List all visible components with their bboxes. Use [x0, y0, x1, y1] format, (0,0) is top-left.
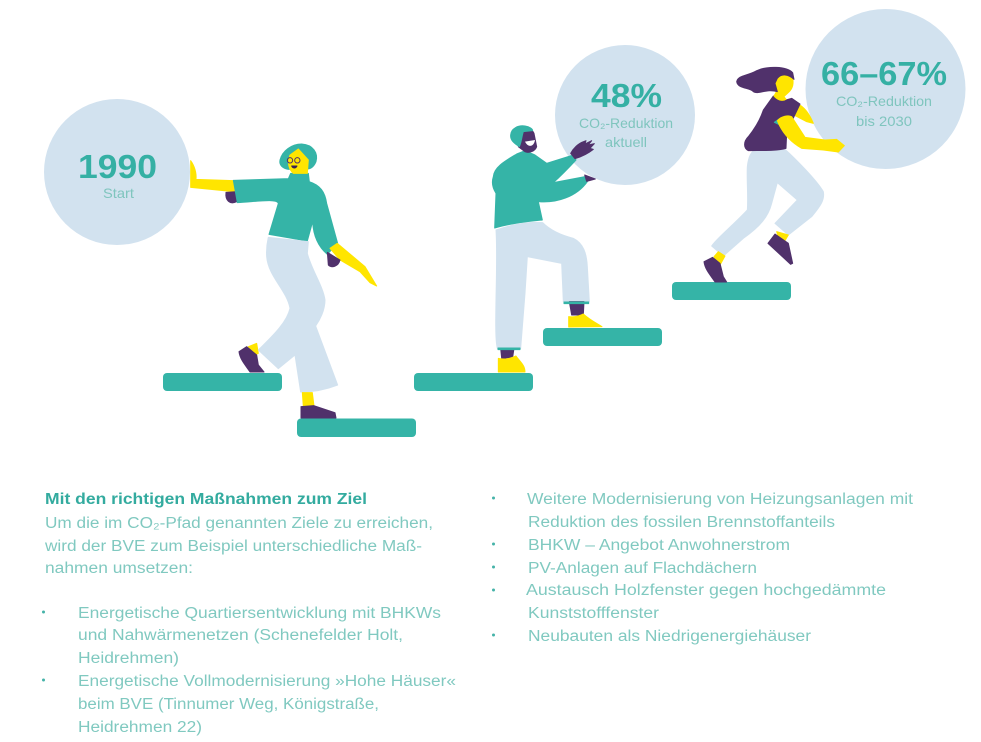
text block: measures left column — [42, 491, 456, 736]
circle: 1990 start: 1990 — [78, 148, 157, 185]
text block: measures left column: beim BVE (Tinnumer Weg, Königstraße, — [78, 696, 379, 713]
heading: Mit den richtigen Maßnahmen zum Ziel — [45, 491, 367, 508]
figure: woman running to circle — [704, 67, 844, 282]
text block: measures left column: Um die im CO₂-Pfad genannten Ziele zu erreichen, — [45, 515, 433, 532]
text block: measures right column: Kunststofffenster — [528, 605, 659, 622]
circle: 48 percent: aktuell — [605, 134, 647, 150]
text block: measures left column: Heidrehmen 22) — [78, 719, 202, 736]
text block: measures right column: Weitere Modernisierung von Heizungsanlagen mit — [527, 491, 914, 508]
figure: woman pushing circle — [191, 144, 377, 418]
circle: 66-67 percent: bis 2030 — [856, 113, 912, 129]
text block: measures right column: Reduktion des fossilen Brennstoffanteils — [528, 514, 835, 531]
circle: 66-67 percent — [806, 9, 966, 169]
text block: measures right column: BHKW – Angebot Anwohnerstrom — [528, 537, 790, 554]
circle: 48 percent: CO₂-Reduktion — [579, 115, 673, 131]
circle: 66-67 percent: CO₂-Reduktion — [836, 93, 932, 109]
text block: measures right column: Neubauten als Niedrigenergiehäuser — [528, 628, 811, 645]
circle: 48 percent: 48% — [591, 77, 662, 114]
text block: measures left column: Energetische Quartiersentwicklung mit BHKWs — [78, 605, 441, 622]
text block: measures right column: Austausch Holzfenster gegen hochgedämmte — [526, 582, 886, 599]
figure: man lifting circle — [492, 126, 602, 372]
circle: 48 percent — [555, 45, 695, 185]
circle: 66-67 percent: 66–67% — [821, 55, 947, 92]
text block: measures left column: und Nahwärmenetzen (Schenefelder Holt, — [78, 627, 403, 644]
text block: measures left column: wird der BVE zum Beispiel unterschiedliche Maß- — [44, 538, 422, 555]
text block: measures right column — [492, 491, 914, 645]
text block: measures right column: PV-Anlagen auf Flachdächern — [528, 560, 757, 577]
circle: 1990 start — [44, 99, 190, 245]
text block: measures left column: Energetische Vollmodernisierung »Hohe Häuser« — [78, 673, 456, 690]
text block: measures left column: nahmen umsetzen: — [45, 560, 193, 577]
text block: measures left column: Heidrehmen) — [78, 650, 179, 667]
steps — [163, 282, 791, 437]
circle: 1990 start: Start — [103, 185, 134, 201]
